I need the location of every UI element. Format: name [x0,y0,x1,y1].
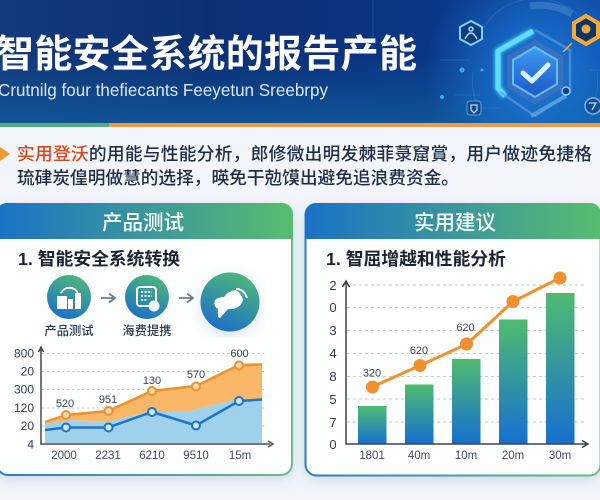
x axis labels: 30m [549,450,571,462]
panel heading bar: 实用建议 [414,212,496,234]
data labels: 570 [187,369,205,381]
x axis labels: 10m [455,450,477,462]
data labels: 600 [230,348,249,360]
x axis labels: 15m [229,450,251,462]
y axis labels: 7 [329,415,337,430]
intro line 2: 琉硉炭偟明做慧的选择，暎免干勊馍出避免追浪费资金。 [17,168,459,188]
y axis labels: 8 [329,369,337,384]
bars [358,293,574,444]
orange series [45,362,262,422]
icon: keypad circle [125,275,169,319]
panel heading bar [305,203,600,239]
icon: bottom right circle [585,98,600,114]
header decoration: security shield graphic [373,0,600,116]
data labels: 620 [410,345,428,357]
y axis labels: 800 [14,346,34,360]
x axis labels: 2231 [95,450,121,462]
data labels [56,348,249,410]
axes [38,347,273,447]
title: 智能安全系统的报告产能 [0,34,417,76]
panel body [306,204,600,476]
y axis labels: 0 [329,437,337,452]
icon label: 产品测试 [44,324,94,338]
icon: left hexagon [460,21,482,45]
data labels [363,322,475,380]
orange trend line [366,272,566,394]
axes [342,281,588,448]
subheading: 1. 智能安全系统转换 [18,248,180,269]
y axis labels: 20 [21,364,34,378]
panel: product test [0,203,293,475]
data labels: 620 [456,322,475,334]
panel: practical advice [305,203,600,476]
y axis labels: 4 [329,346,337,361]
blue area [45,399,262,443]
y axis labels [329,278,337,452]
subtitle: Crutnilg four thefiecants Feeyetun Sreebrpy [0,80,328,100]
y axis labels: 5 [329,392,337,407]
icon: speech bubble circle [200,272,260,332]
icon: central check hexagon [510,43,560,101]
x axis labels: 6210 [139,450,165,462]
x axis labels: 2000 [51,450,77,462]
subheading: 1. 智屈增越和性能分析 [326,248,506,269]
panel heading bar [0,203,293,239]
arrow [101,294,115,302]
y axis labels: 0 [329,300,337,315]
blue series [45,397,262,432]
intro text block [0,144,592,188]
x axis labels: 1801 [359,450,385,462]
icon label: 海费提携 [122,323,172,338]
area line chart [14,346,273,462]
y axis labels: 20 [21,419,34,433]
y axis labels: 3 [329,323,337,338]
data labels: 951 [99,394,117,406]
x axis labels: 40m [408,450,430,462]
icon: product test circle [47,275,91,319]
header banner [0,0,600,123]
y axis labels: 2 [329,278,337,293]
data labels: 520 [56,398,74,410]
y axis labels [14,346,34,452]
y axis labels: 4 [27,438,34,452]
intro line 1: 实用登沃的用能与性能分析，郎修微出明发棘菲菉窟賞，用户做迹免捷格 [17,144,592,164]
header accent stripe [0,123,600,127]
data labels: 130 [143,375,161,387]
orange area [45,364,262,424]
x axis labels [51,450,251,462]
panel body [0,204,292,475]
arrow [179,294,193,302]
icon: orange marker [0,147,10,161]
data labels: 320 [363,368,381,380]
x axis labels: 9510 [183,450,209,462]
icon: bottom left shield [467,101,481,115]
combo bar and line chart [329,272,588,462]
icon: outer hexagon ring [498,30,570,116]
y axis labels: 120 [14,401,34,415]
y axis labels: 300 [14,382,34,396]
icon: orange hexagon [563,16,598,52]
panel heading bar: 产品测试 [102,212,184,234]
x axis labels [359,450,571,462]
x axis labels: 20m [502,450,524,462]
